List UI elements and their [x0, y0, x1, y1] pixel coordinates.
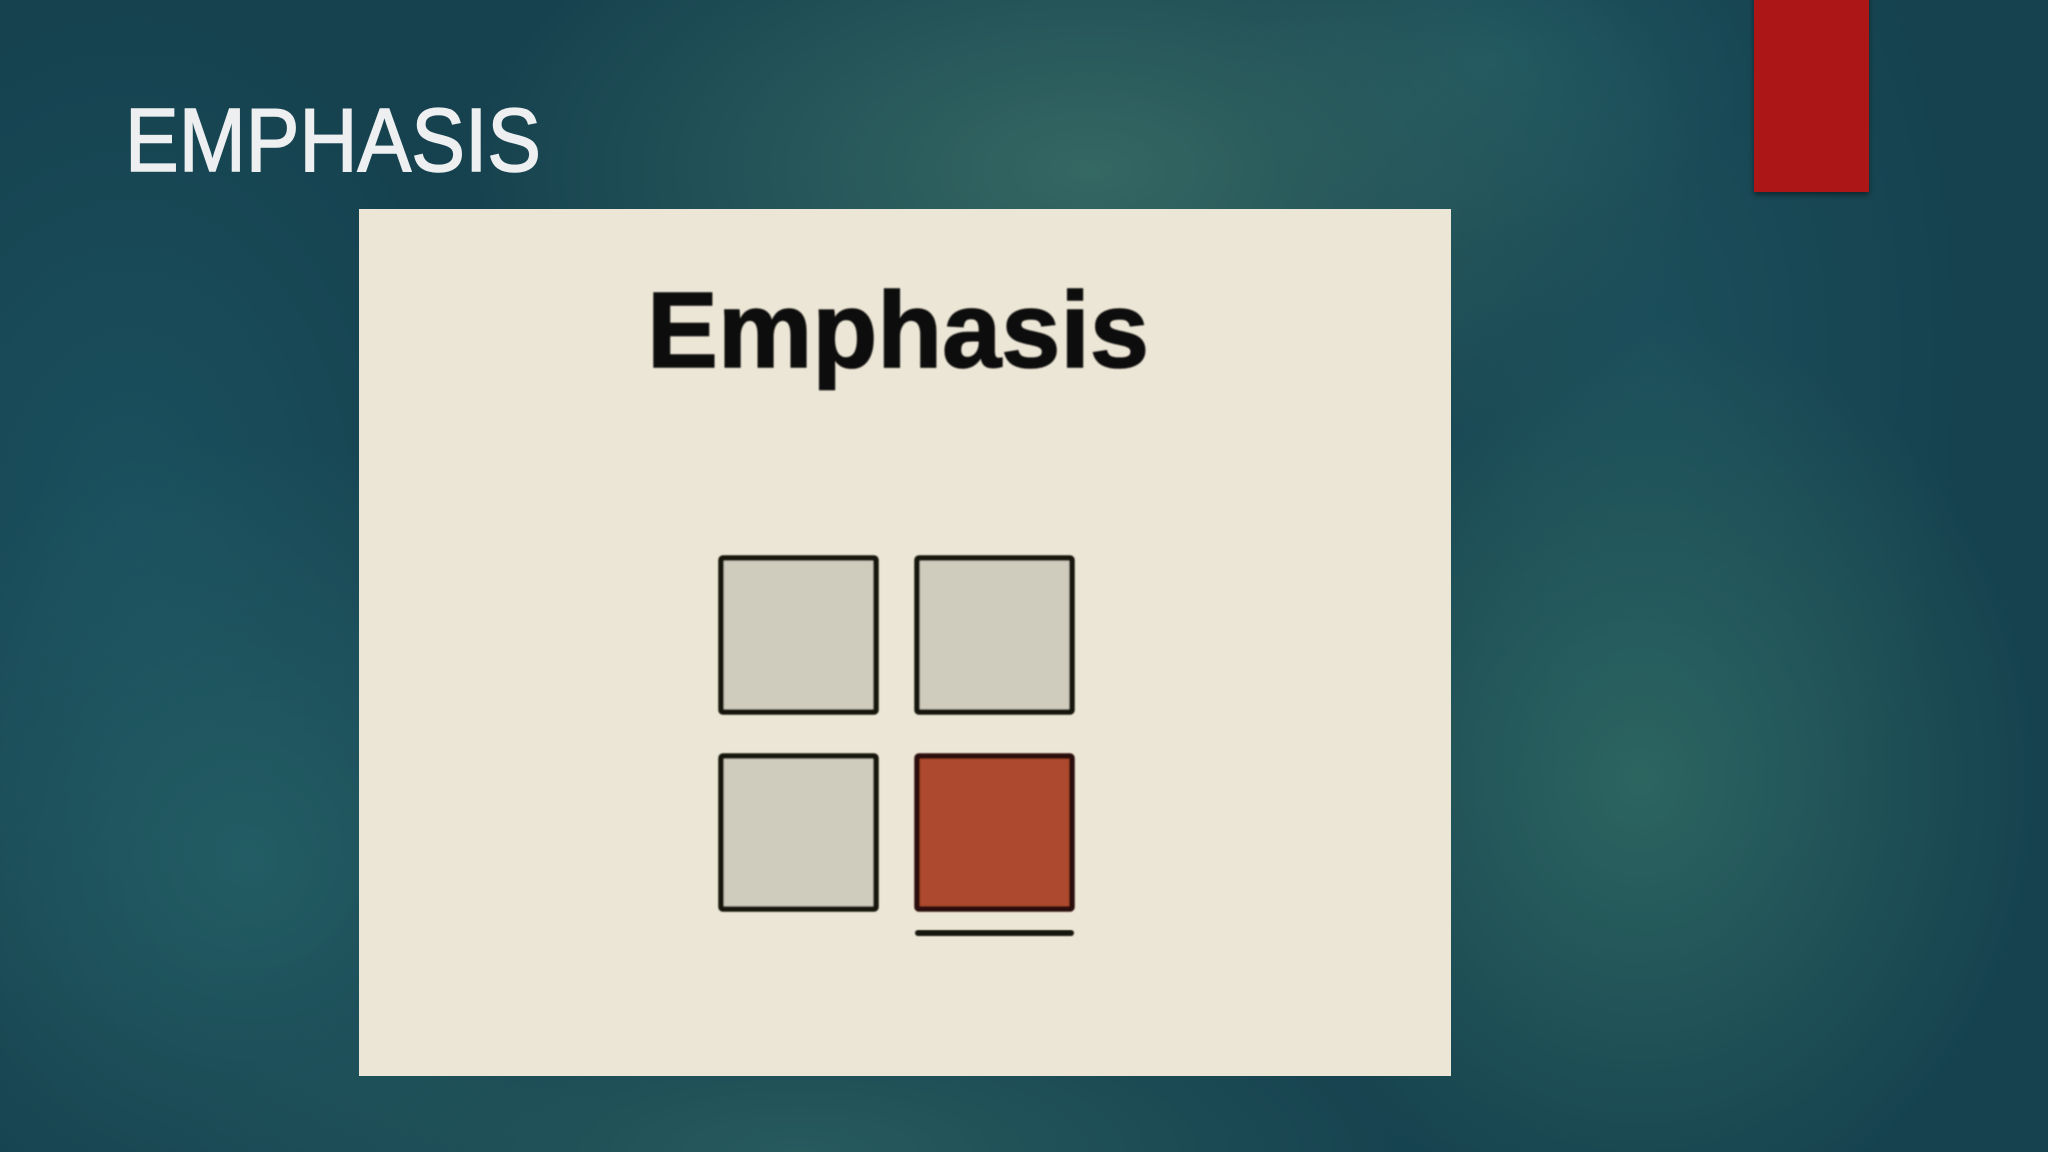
image panel: emphasis diagram [359, 209, 1451, 1076]
panel heading: Emphasis [647, 269, 1149, 390]
panel background [359, 209, 1451, 1076]
grid of four squares [721, 558, 1072, 909]
square: bottom left [721, 756, 876, 909]
square: bottom right, emphasized [917, 756, 1072, 909]
red accent tab [1754, 0, 1869, 192]
underline below emphasized square [915, 930, 1074, 936]
slide title: EMPHASIS [125, 91, 541, 191]
square: top right [917, 558, 1072, 712]
square: top left [721, 558, 876, 712]
